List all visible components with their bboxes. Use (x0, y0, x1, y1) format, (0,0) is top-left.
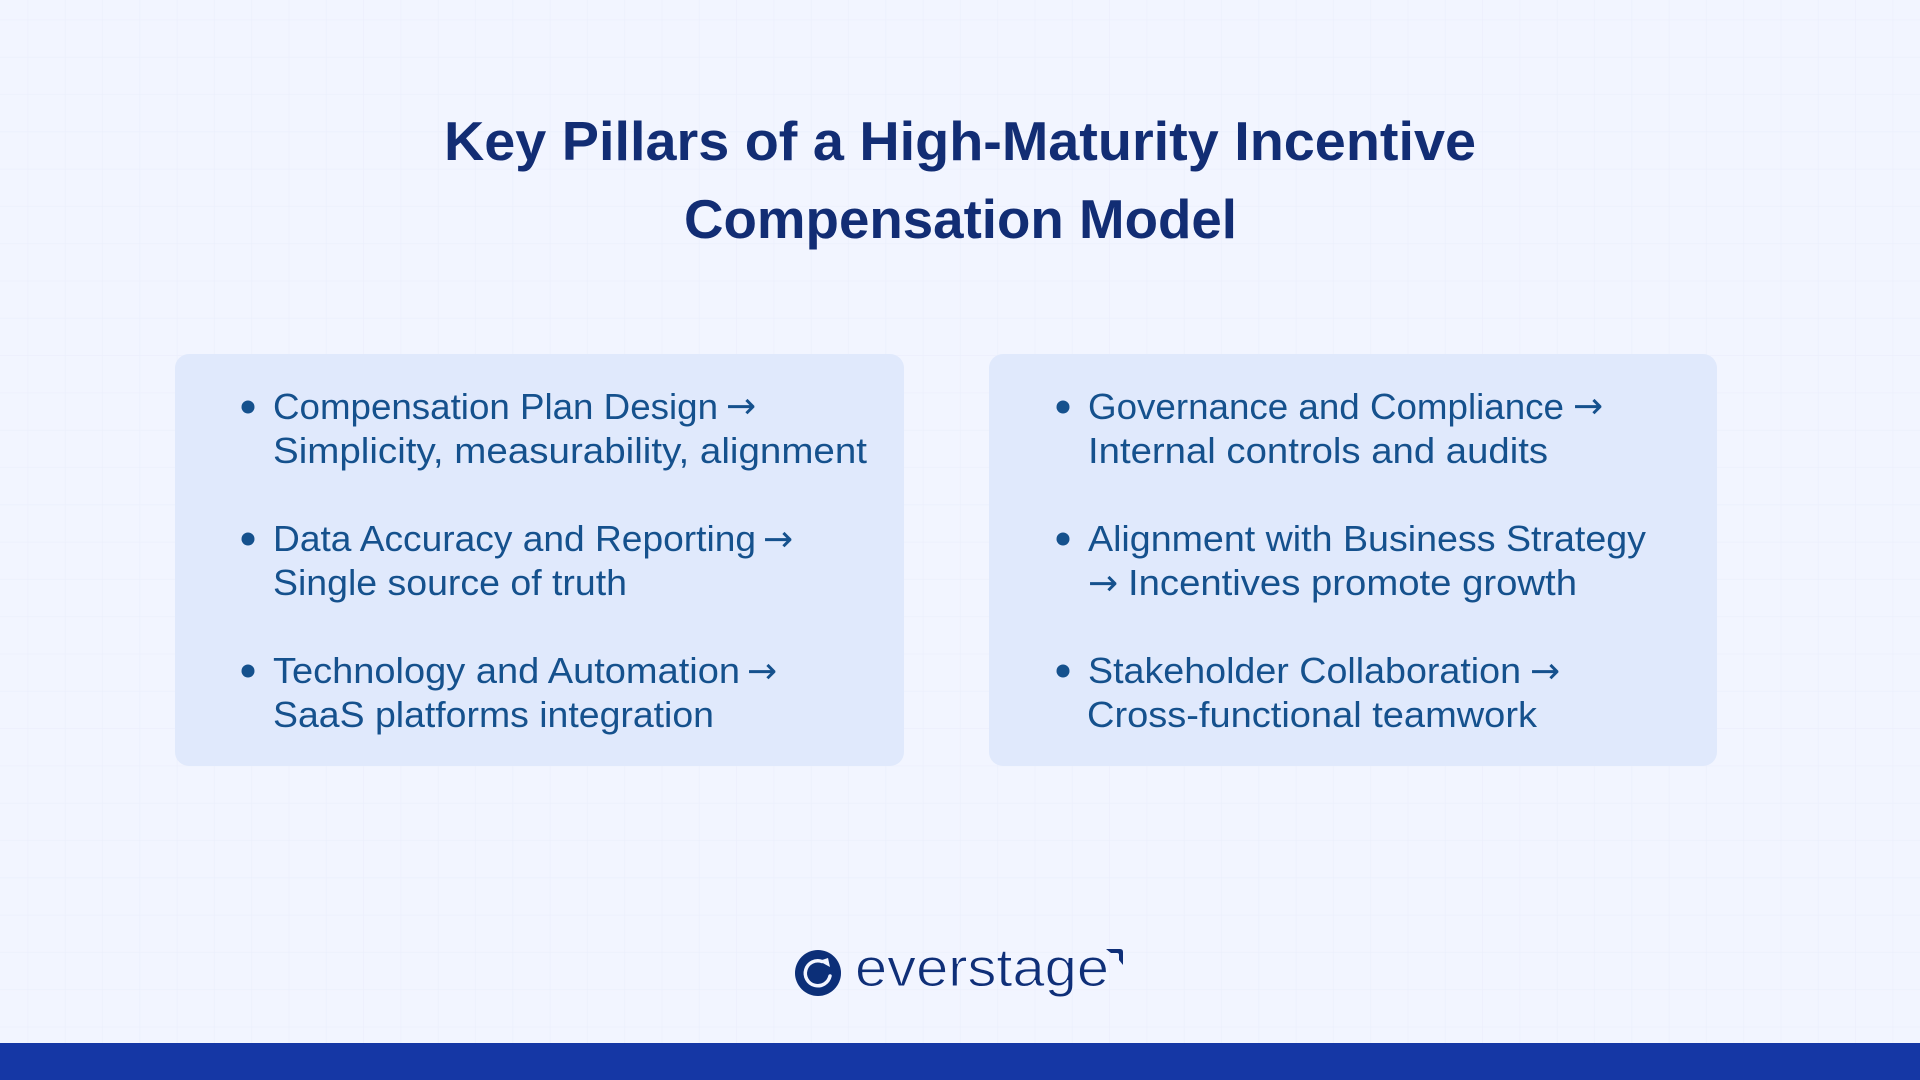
item: data accuracy and reporting (242, 518, 793, 603)
item: technology and automation: Technology and Automation (273, 650, 740, 691)
item: compensation plan design (242, 386, 867, 471)
panel: right pillars (989, 354, 1717, 766)
icon: everstage mark (795, 950, 841, 996)
item: governance and compliance: → (1573, 386, 1603, 427)
item: governance and compliance: Internal controls and audits (1088, 430, 1548, 471)
item: data accuracy and reporting: Data Accuracy and Reporting (273, 518, 756, 559)
item: technology and automation (242, 650, 777, 735)
item: data accuracy and reporting: → (763, 519, 793, 560)
title: Compensation Model (684, 188, 1237, 250)
item: alignment with business strategy: → (1088, 563, 1118, 604)
item: stakeholder collaboration: Cross-functional teamwork (1087, 694, 1538, 735)
title (444, 110, 1476, 250)
item: data accuracy and reporting: Single source of truth (273, 562, 627, 603)
item: technology and automation: SaaS platforms integration (273, 694, 714, 735)
title: Key Pillars of a High-Maturity Incentive (444, 110, 1476, 172)
item: stakeholder collaboration (1056, 650, 1560, 735)
item: alignment with business strategy: Incentives promote growth (1128, 562, 1577, 603)
item: alignment with business strategy: Alignment with Business Strategy (1088, 518, 1646, 559)
item: governance and compliance (1056, 386, 1603, 471)
item: compensation plan design: Compensation Plan Design (273, 386, 718, 427)
panel: left pillars (175, 354, 904, 766)
item: compensation plan design: Simplicity, measurability, alignment (273, 430, 867, 471)
item: stakeholder collaboration: → (1530, 651, 1560, 692)
item: governance and compliance: Governance and Compliance (1088, 386, 1564, 427)
icon: wordmark corner tick (1106, 949, 1123, 965)
item: compensation plan design: → (726, 386, 756, 427)
footer bar (0, 1043, 1920, 1080)
item: alignment with business strategy (1056, 518, 1646, 604)
logo: everstage (795, 938, 1123, 998)
item: technology and automation: → (747, 651, 777, 692)
wordmark: everstage (855, 938, 1109, 998)
item: stakeholder collaboration: Stakeholder Collaboration (1088, 650, 1521, 691)
